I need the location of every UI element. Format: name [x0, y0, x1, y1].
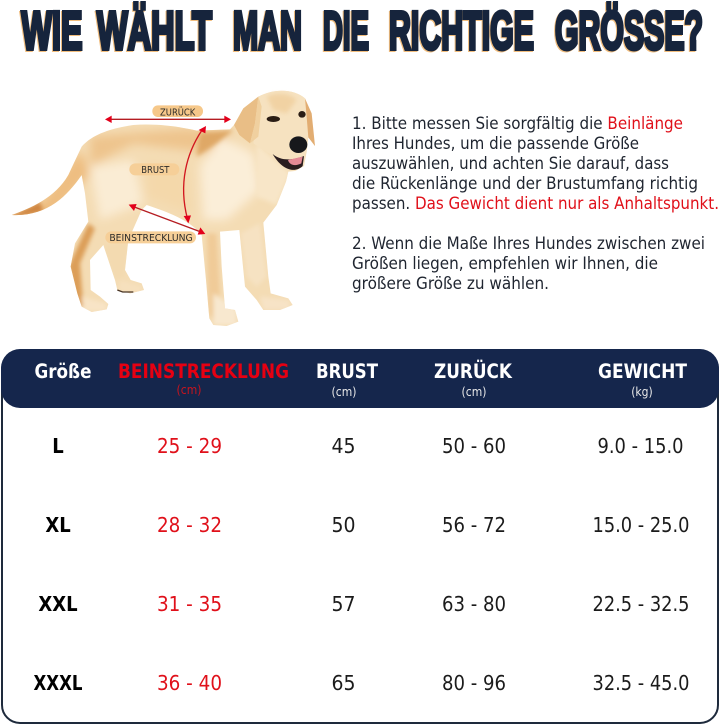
- row: XXL: 57: [332, 592, 356, 616]
- text block: measuring instructions: passen. Das Gewicht dient nur als Anhaltspunkt.: [352, 193, 719, 213]
- label: brust: [129, 163, 179, 176]
- table header: (kg): [631, 385, 653, 399]
- row: XL: [45, 513, 690, 537]
- table header: GEWICHT: [598, 360, 687, 383]
- row: L: 25 - 29: [157, 434, 222, 458]
- text block: measuring instructions: [352, 113, 719, 293]
- row: L: 50 - 60: [442, 434, 506, 458]
- arrow: back: [105, 116, 231, 123]
- title: DIE: [322, 2, 368, 62]
- row: XL: 50: [332, 513, 356, 537]
- row: XXL: 31 - 35: [157, 592, 222, 616]
- row: XXXL: 32.5 - 45.0: [592, 671, 690, 695]
- table header: (cm): [462, 385, 486, 399]
- title: DIE: [323, 1, 369, 61]
- row: XXL: 63 - 80: [442, 592, 506, 616]
- title: WÄHLT: [96, 2, 211, 62]
- title: RICHTIGE: [388, 2, 533, 62]
- row: XL: 28 - 32: [157, 513, 222, 537]
- table header: BEINSTRECKLUNG: [118, 360, 289, 383]
- row: XXXL: 65: [332, 671, 356, 695]
- table header: ZURÜCK: [434, 359, 513, 383]
- table header: (cm): [332, 385, 356, 399]
- text block: measuring instructions: 1. Bitte messen Sie sorgfältig die Beinlänge: [352, 113, 683, 133]
- table header: BRUST: [316, 360, 378, 383]
- table header: [1, 349, 719, 408]
- text block: measuring instructions: die Rückenlänge und der Brustumfang richtig: [352, 173, 698, 193]
- row: XXXL: 36 - 40: [157, 671, 222, 695]
- table frame: [2, 352, 718, 723]
- row: XL: 56 - 72: [442, 513, 506, 537]
- row: L: [52, 434, 684, 458]
- row: XL: 15.0 - 25.0: [592, 513, 690, 537]
- row: XXXL: XXXL: [34, 671, 82, 695]
- arrow: chest: [184, 126, 206, 223]
- row: XXL: 22.5 - 32.5: [592, 592, 690, 616]
- title: MAN: [233, 1, 302, 61]
- arrow: leg: [129, 204, 205, 235]
- head: [253, 91, 308, 171]
- row: XL: XL: [45, 513, 71, 537]
- row: XXXL: [34, 671, 690, 695]
- row: XXXL: 80 - 96: [442, 671, 506, 695]
- table header: (cm): [177, 383, 201, 397]
- row: XXL: XXL: [38, 592, 78, 616]
- title: [20, 1, 703, 62]
- label: zurück: ZURÜCK: [160, 107, 196, 118]
- label: brust: BRUST: [141, 165, 170, 176]
- title: MAN: [232, 2, 301, 62]
- title: WIE: [22, 1, 82, 61]
- label: beinstrecklung: BEINSTRECKLUNG: [109, 233, 193, 244]
- title: WIE: [20, 2, 82, 62]
- text block: measuring instructions: Größen liegen, empfehlen wir Ihnen, die: [352, 253, 658, 273]
- table header: Größe: [34, 360, 92, 383]
- title: WÄHLT: [97, 1, 212, 61]
- text block: measuring instructions: 2. Wenn die Maße Ihres Hundes zwischen zwei: [352, 233, 705, 253]
- text block: measuring instructions: Ihres Hundes, um die passende Größe: [352, 133, 639, 153]
- row: L: 9.0 - 15.0: [598, 434, 684, 458]
- size table: [1, 349, 719, 723]
- label: zurück: [152, 105, 203, 118]
- icon: dog: [12, 90, 315, 326]
- text block: measuring instructions: auszuwählen, und achten Sie darauf, dass: [352, 153, 669, 173]
- row: XXL: [38, 592, 690, 616]
- row: L: L: [52, 434, 64, 458]
- title: RICHTIGE: [389, 1, 534, 61]
- text block: measuring instructions: größere Größe zu wählen.: [352, 273, 549, 293]
- row: L: 45: [332, 434, 356, 458]
- dog measurement diagram: [12, 90, 315, 326]
